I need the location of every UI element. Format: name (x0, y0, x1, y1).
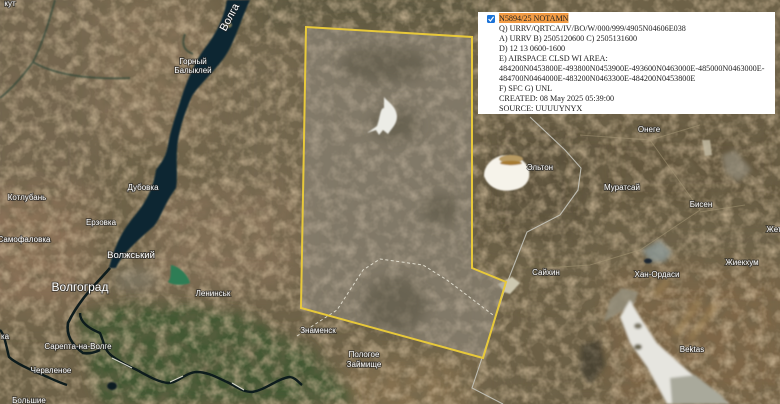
restricted airspace polygon (297, 27, 506, 358)
place labels: Сарепта-на-Волге (44, 342, 112, 351)
roads (545, 125, 745, 268)
place labels: Онеге (638, 125, 661, 134)
small lakes south of Volgograd (107, 382, 117, 390)
dark patch south of lake (580, 340, 605, 385)
place labels: ка (1, 332, 10, 341)
place labels: Ерзовка (86, 218, 117, 227)
lower Volga river channels (0, 268, 302, 392)
salt pan near Khan-Ordasy (642, 240, 672, 262)
place labels: Эльтон (527, 163, 553, 172)
NOTAM text body: SOURCE: UUUUYNYX (499, 104, 582, 113)
icon: checkbox (487, 15, 495, 23)
place labels: Муратсай (604, 183, 640, 192)
polygon outline (301, 27, 506, 358)
NOTAM text body (499, 24, 765, 113)
NOTAM text body: 484700N0464000E-483200N0463300E-484200N0453800E (499, 74, 695, 83)
place labels: Сайхин (532, 268, 560, 277)
NOTAM text body: D) 12 13 0600-1600 (499, 44, 565, 53)
place labels: Дубовка (127, 183, 159, 192)
place labels: Горный (179, 57, 207, 66)
NOTAM text body: F) SFC G) UNL (499, 84, 552, 93)
place labels: Бисен (690, 200, 712, 209)
NOTAM text body: Q) URRV/QRTCA/IV/BO/W/000/999/4905N04606E038 (499, 24, 686, 33)
administrative boundary line (472, 117, 581, 404)
inner salt lake (367, 97, 397, 135)
NOTAM text body: A) URRV B) 2505120600 C) 2505131600 (499, 34, 637, 43)
pale patches east (722, 150, 752, 182)
NOTAM text body: E) AIRSPACE CLSD WI AREA: (499, 54, 608, 63)
tributary streams (0, 0, 193, 98)
place labels: Балыклей (174, 66, 212, 75)
place labels: Червленое (31, 366, 72, 375)
settlement near boundary (498, 277, 520, 294)
place labels: Волга (218, 1, 243, 33)
green lake near Leninsk (168, 265, 190, 285)
place labels: Bektas (680, 345, 704, 354)
place labels: Ленинськ (196, 289, 231, 298)
floodplain: Volga-Akhtuba green area (76, 304, 355, 404)
island in reservoir (224, 22, 232, 28)
Volga reservoir (109, 0, 250, 268)
NOTAM info panel (478, 12, 775, 114)
highlighted NOTAM id: N5894/25 NOTAMN (499, 14, 569, 23)
NOTAM text body: 484200N0453800E-493800N0453900E-493600N0463000E-485000N0463000E- (499, 64, 765, 73)
Volgograd urban area (113, 268, 157, 292)
place labels: Знаменск (300, 326, 336, 335)
salt lake Baskunchak area (604, 288, 730, 404)
place labels: Займище (347, 360, 382, 369)
darker interior patches (340, 47, 458, 333)
place labels: Волжський (107, 250, 155, 261)
place labels: Котлубань (8, 193, 46, 202)
place labels: Волгоград (52, 280, 108, 294)
sand ridges (655, 280, 715, 340)
river sandbars (112, 358, 244, 390)
NOTAM text body: CREATED: 08 May 2025 05:39:00 (499, 94, 614, 103)
place labels: Пологое (349, 350, 380, 359)
dashed inner track (297, 259, 493, 336)
place labels: Жиекхум (725, 258, 759, 267)
Lake Elton (484, 155, 529, 191)
place labels: Хан-Ордаси (635, 270, 679, 279)
